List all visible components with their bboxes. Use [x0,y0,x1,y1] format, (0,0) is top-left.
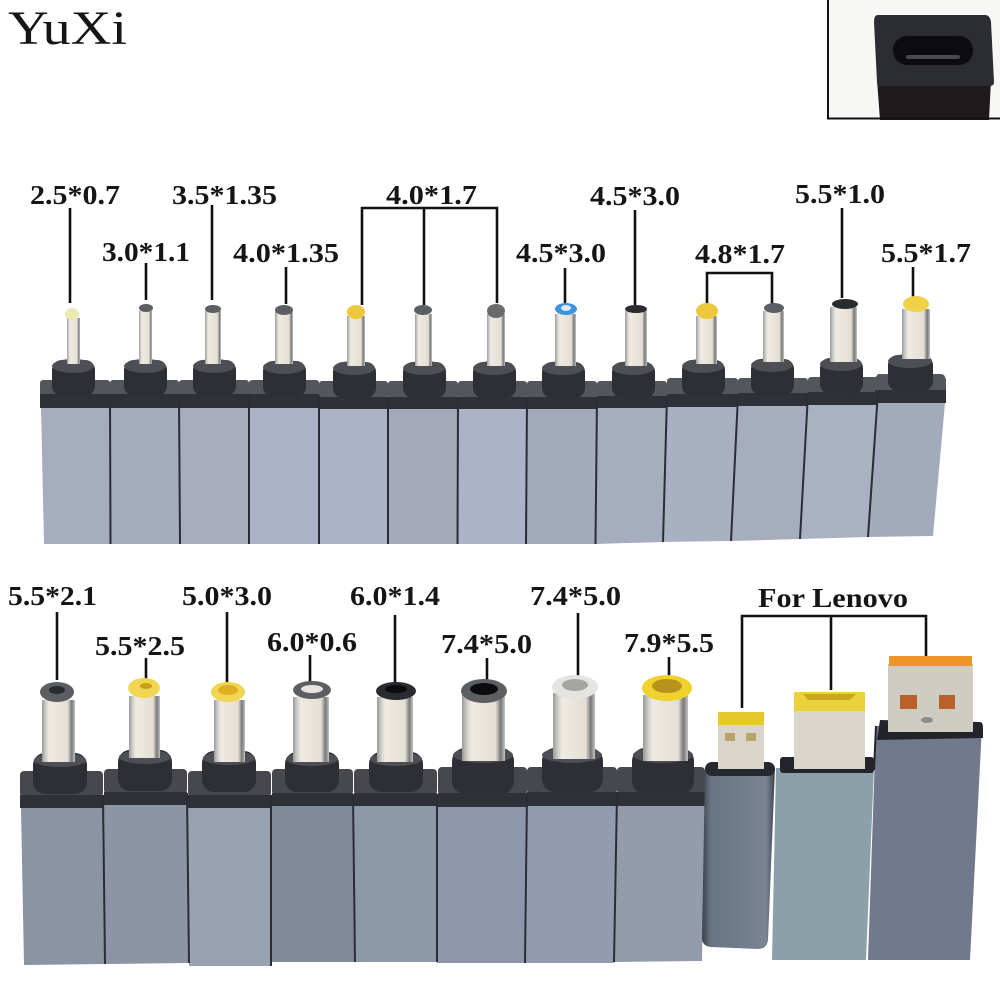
adapter 6.0*0.6 [272,681,355,962]
label 3.0*1.1 [102,237,190,300]
adapter 7.4*5.0 white [525,675,617,963]
inset: USB-C socket photo [828,0,1000,120]
adapter 5.0*3.0 [188,682,271,966]
label 4.0*1.35: 4.0*1.35 [233,238,339,268]
label 6.0*0.6 [267,627,357,683]
label 7.4*5.0 lower: 7.4*5.0 [441,629,532,659]
label 3.5*1.35: 3.5*1.35 [172,180,277,210]
label 4.0*1.7 with bracket: 4.0*1.7 [386,180,477,210]
bottom row adapters [20,656,983,966]
label 4.8*1.7 with bracket [695,239,785,305]
label 5.0*3.0: 5.0*3.0 [182,581,272,611]
adapter 3.5*1.35 [179,305,249,544]
label 4.5*3.0 lower [516,238,606,305]
label 4.0*1.7 with bracket [362,180,497,305]
label 5.5*1.7: 5.5*1.7 [881,238,971,268]
label 4.5*3.0 upper [590,181,680,305]
label For Lenovo with bracket: For Lenovo [758,583,908,613]
adapter 2.5*0.7 [40,308,110,544]
label 4.5*3.0 upper: 4.5*3.0 [590,181,680,211]
label 5.5*1.0: 5.5*1.0 [795,179,885,209]
label 7.4*5.0 upper: 7.4*5.0 [530,581,621,611]
Lenovo slim plug large [772,692,874,960]
label 7.9*5.5: 7.9*5.5 [624,628,714,658]
top row divider lines [110,392,878,544]
label 4.5*3.0 lower: 4.5*3.0 [516,238,606,268]
adapter 7.9*5.5 [614,675,705,962]
label 5.5*1.0 [795,179,885,298]
adapter 5.5*2.5 [104,678,189,964]
label 2.5*0.7 [30,180,120,303]
label 7.4*5.0 upper [530,581,621,683]
adapter 4.5*3.0 dark tip [596,305,667,544]
adapter 5.5*2.1 [20,682,105,965]
Lenovo slim plug small [702,712,775,949]
top row labels and leader lines [30,179,971,305]
bottom row divider lines [103,793,617,966]
top row adapters [40,296,946,544]
adapter 4.8*1.7 yellow tip [663,303,738,542]
label 5.5*2.5 [95,631,185,684]
label 6.0*0.6: 6.0*0.6 [267,627,357,657]
adapter 4.0*1.35 [249,305,319,544]
adapter 4.8*1.7 grey tip [731,303,808,541]
brand title: YuXi [8,2,127,55]
label 6.0*1.4: 6.0*1.4 [350,581,440,611]
adapter 6.0*1.4 [354,682,437,962]
label 3.5*1.35 [172,180,277,300]
label 3.0*1.1: 3.0*1.1 [102,237,190,267]
label 4.8*1.7 with bracket: 4.8*1.7 [695,239,785,269]
adapter 4.5*3.0 blue tip [526,303,597,544]
label 6.0*1.4 [350,581,440,685]
label 2.5*0.7: 2.5*0.7 [30,180,120,210]
label 5.5*2.1 [8,581,97,680]
label 4.0*1.35 [233,238,339,304]
label 5.5*2.1: 5.5*2.1 [8,581,97,611]
bottom row labels and leader lines [8,581,926,708]
label For Lenovo with bracket [742,583,926,708]
label 7.4*5.0 lower [441,629,532,684]
label 5.5*1.7 [881,238,971,297]
label 7.9*5.5 [624,628,714,683]
adapter 5.5*1.7 [868,296,946,537]
adapter 4.0*1.7 grey tip [388,305,458,544]
adapter 7.4*5.0 dark [437,679,527,963]
adapter 4.0*1.7 dark tip [458,304,527,544]
Lenovo USB-style plug [868,656,983,960]
adapter 5.5*1.0 [800,299,878,539]
label 5.0*3.0 [182,581,272,685]
adapter 4.0*1.7 yellow tip [319,305,388,544]
label 5.5*2.5: 5.5*2.5 [95,631,185,661]
adapter 3.0*1.1 [110,304,180,544]
